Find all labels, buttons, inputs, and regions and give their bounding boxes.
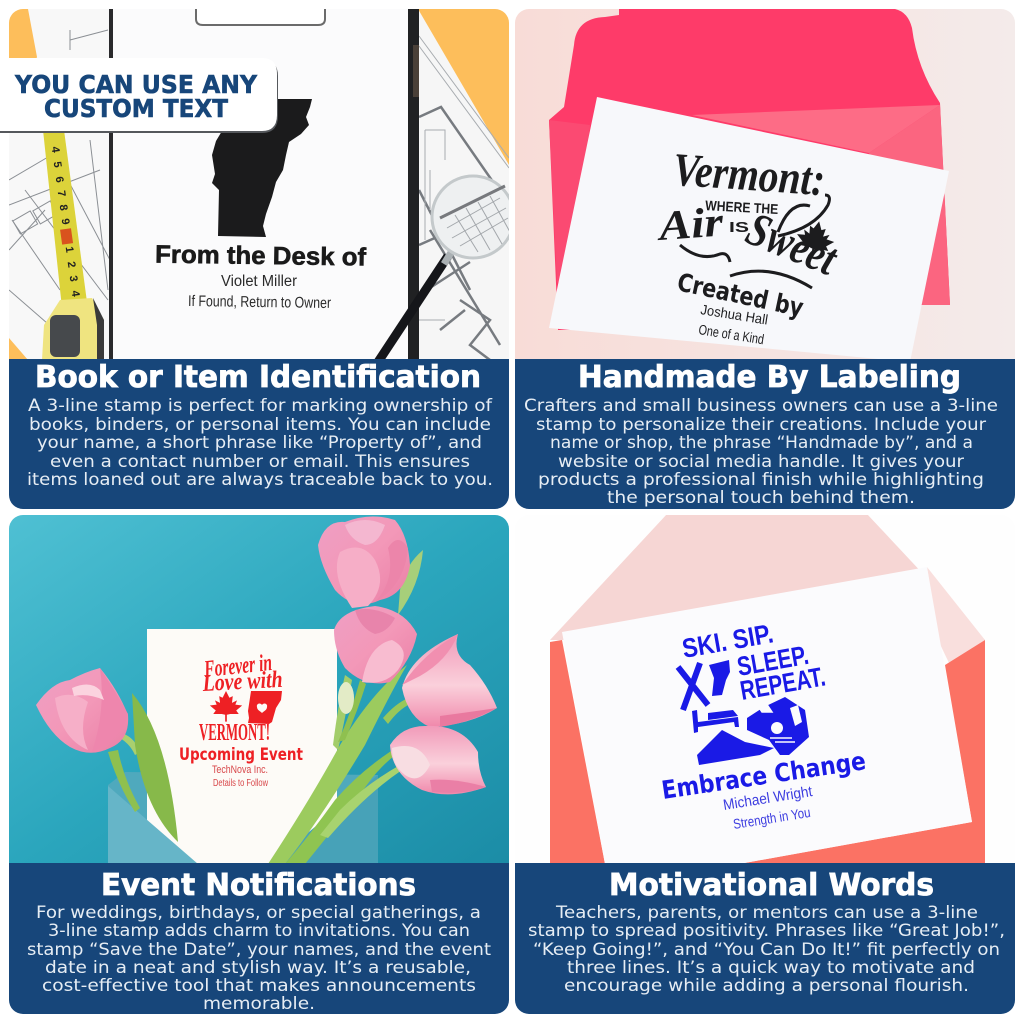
tape measure: 4 [49, 146, 61, 154]
caption: handmade by labeling: name or shop, the phrase “Handmade by”, and a [550, 433, 973, 453]
caption: event notifications: memorable. [203, 994, 315, 1014]
photo: tulips and envelope [9, 515, 509, 864]
caption: handmade by labeling [515, 359, 1015, 509]
callout: you can use any custom text [0, 58, 278, 133]
caption: event notifications: For weddings, birthdays, or special gatherings, a [36, 903, 481, 923]
white card [549, 97, 949, 362]
tulip [402, 634, 497, 727]
caption: motivational words: stamp to spread positivity. Phrases like “Great Job!”, [528, 921, 1005, 941]
stamp art: ski sip sleep repeat [678, 618, 828, 765]
photo: salmon envelope and card [550, 515, 985, 863]
stamp art: Vermont where the air is sweet: Sweet [739, 202, 846, 286]
caption: motivational words: encourage while adding a personal flourish. [564, 976, 969, 996]
stamp text: Michael Wright: Michael Wright [722, 783, 814, 814]
clipboard clip [196, 9, 325, 25]
stamp art: forever in love with Vermont: Love with [201, 667, 283, 697]
stamp art: ski sip sleep repeat: SKI. SIP. [680, 618, 776, 664]
white card [562, 567, 972, 864]
caption: book or item identification: books, binders, or personal items. You can include [29, 415, 491, 435]
caption: event notifications: date in a neat and stylish way. It’s a reusable, [45, 958, 471, 978]
photo: clipboard on blueprints [9, 9, 514, 362]
icon: mountains [697, 730, 774, 765]
stamp art: Vermont where the air is sweet: IS [729, 219, 749, 236]
stamp art: ski sip sleep repeat: SLEEP. [735, 640, 811, 682]
caption: handmade by labeling: Crafters and small business owners can use a 3-line [524, 396, 998, 416]
caption: handmade by labeling: website or social media handle. It gives your [558, 452, 964, 472]
tape measure: 2 [65, 261, 77, 268]
caption: motivational words: Motivational Words [609, 868, 934, 903]
photo: pink envelope and card [515, 9, 1015, 362]
magnifying glass [378, 176, 514, 362]
caption: handmade by labeling: Handmade By Labeling [578, 360, 961, 395]
stamp text: Strength in You: Strength in You [732, 804, 812, 832]
caption: book or item identification [9, 359, 509, 509]
stamp art: forever in love with Vermont: VERMONT! [199, 720, 270, 746]
panel: handmade by labeling [515, 9, 1015, 509]
tulip [36, 668, 128, 753]
stamp art: Vermont where the air is sweet: Air [654, 200, 725, 250]
callout: you can use any custom text: YOU CAN USE ANY [14, 70, 258, 99]
panel: book or item identification [0, 9, 514, 509]
stamp art: forever in love with Vermont: Forever in [202, 650, 273, 683]
caption: book or item identification: Book or Item Identification [35, 360, 481, 395]
tulip [334, 606, 417, 683]
caption: handmade by labeling: stamp to personalize their creations. Include your [536, 415, 986, 435]
panel: event notifications [9, 515, 509, 1014]
stamp art: forever in love with Vermont [179, 650, 303, 789]
tape measure: 1 [63, 246, 75, 253]
tape measure: 7 [55, 190, 67, 197]
white card [147, 629, 337, 864]
caption: book or item identification: A 3-line stamp is perfect for marking ownership of [28, 396, 493, 416]
stamp text: From the Desk of: From the Desk of [155, 241, 367, 271]
caption: book or item identification: your name, a short phrase like “Property of”, and [37, 433, 482, 453]
stamp art: Vermont where the air is sweet: WHERE THE [705, 197, 779, 217]
tape measure: 6 [53, 176, 65, 183]
tape measure: 5 [51, 161, 63, 168]
caption: motivational words: “Keep Going!”, and “You Can Do It!” fit perfectly on [533, 940, 1000, 960]
stems and leaves [108, 550, 424, 864]
caption: event notifications: cost-effective tool that makes announcements [42, 976, 476, 996]
envelope [108, 772, 378, 820]
stamp text: Created by: Created by [675, 268, 806, 322]
icon: wine glass in state [709, 660, 730, 696]
tape measure: 9 [59, 218, 71, 225]
tape measure: 3 [67, 275, 79, 282]
stamp text: Details to Follow: Details to Follow [213, 778, 269, 789]
tulip [318, 516, 410, 608]
caption: handmade by labeling: products a professional finish while highlighting [538, 470, 984, 490]
caption: event notifications: 3-line stamp adds charm to invitations. You can [48, 921, 470, 941]
tape measure: 8 [57, 204, 69, 211]
stamp text: Upcoming Event: Upcoming Event [179, 745, 303, 765]
caption: handmade by labeling: the personal touch behind them. [607, 488, 915, 508]
caption: event notifications: Event Notifications [101, 868, 416, 903]
caption: motivational words: Teachers, parents, or mentors can use a 3-line [555, 903, 978, 923]
stamp text: TechNova Inc.: TechNova Inc. [212, 764, 268, 776]
tulip [390, 726, 486, 794]
tape measure [42, 130, 104, 360]
callout: you can use any custom text: CUSTOM TEXT [44, 94, 228, 123]
stamp text: One of a Kind: One of a Kind [698, 321, 765, 347]
stamp text: Violet Miller: Violet Miller [221, 273, 297, 290]
icon: skis [678, 663, 708, 710]
stamp art: ski sip sleep repeat: REPEAT. [738, 661, 828, 706]
caption: book or item identification: even a contact number or email. This ensures [50, 452, 470, 472]
icon: bed [692, 710, 739, 733]
stamp text: Embrace Change: Embrace Change [660, 746, 868, 805]
stamp text: return line: If Found, Return to Owner [188, 293, 331, 312]
icon: mountain lake badge [747, 697, 809, 755]
caption: event notifications: stamp “Save the Date”, your names, and the event [27, 940, 491, 960]
stamp art: Vermont where the air is sweet: Vermont: [671, 144, 827, 206]
stamp art: Vermont where the air is sweet [654, 144, 846, 347]
stamp: Vermont silhouette [212, 99, 312, 237]
caption: event notifications [9, 863, 509, 1014]
caption: book or item identification: items loaned out are always traceable back to you. [27, 470, 493, 490]
caption: motivational words [515, 863, 1015, 1014]
panel: motivational words [515, 514, 1015, 1014]
tape measure: 4 [69, 290, 81, 298]
swirls [680, 195, 829, 288]
stamp text: Joshua Hall: Joshua Hall [700, 301, 769, 328]
caption: motivational words: three lines. It’s a quick way to motivate and [567, 958, 975, 978]
